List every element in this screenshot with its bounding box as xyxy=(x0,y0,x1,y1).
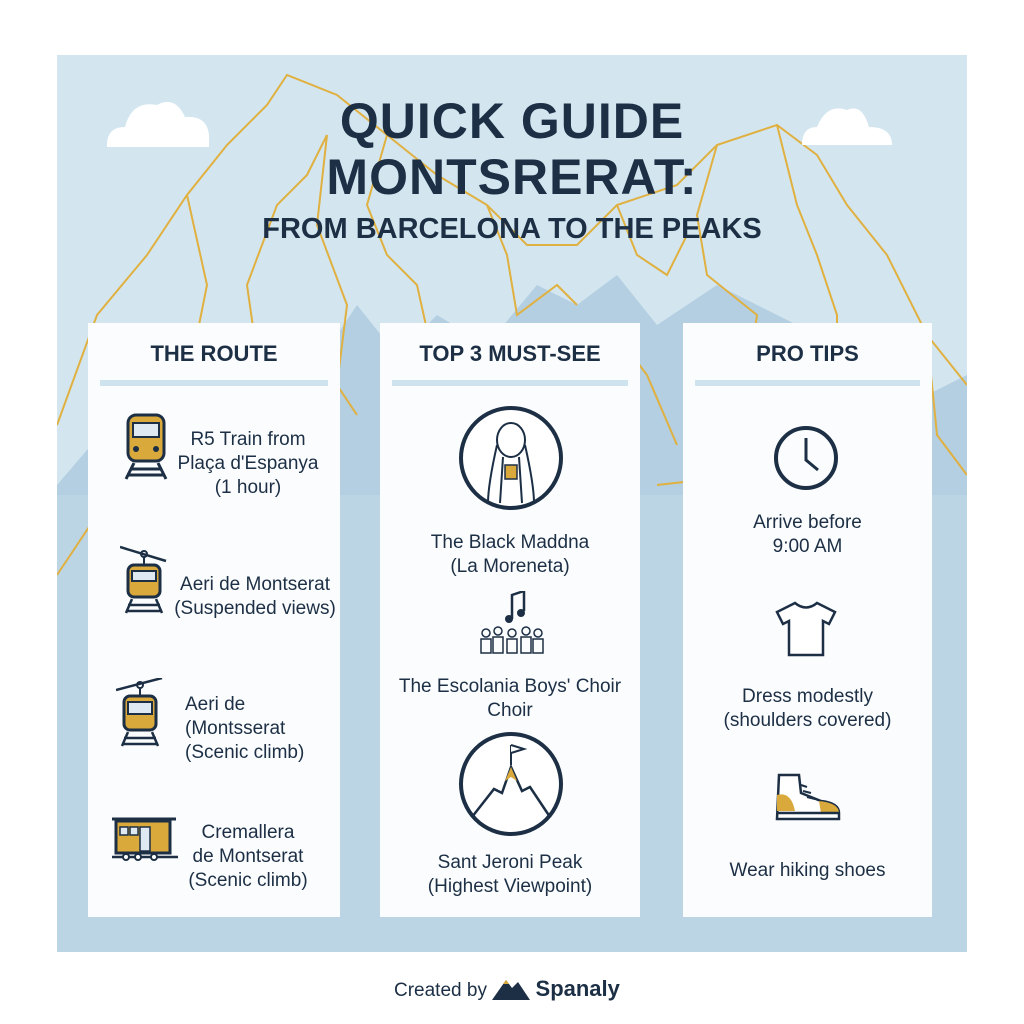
title xyxy=(326,93,698,205)
text: peak: (Highest Viewpoint) xyxy=(428,876,592,897)
text: aeri 2 xyxy=(185,694,304,763)
text: aeri 2: (Scenic climb) xyxy=(185,742,304,763)
panel: pro tips xyxy=(683,323,932,917)
text: cremallera: Cremallera xyxy=(202,822,294,843)
icon: peak xyxy=(459,732,563,836)
text: choir: The Escolania Boys' Choir xyxy=(399,676,621,697)
icon: rack railway xyxy=(112,818,178,861)
icon: logo xyxy=(492,980,530,1000)
panel: the route: THE ROUTE xyxy=(150,341,278,366)
text: arrive xyxy=(753,512,862,557)
title: MONTSRERAT: xyxy=(326,149,698,205)
text: R5 train: R5 Train from xyxy=(190,429,306,450)
panel: the route xyxy=(88,323,340,917)
text: cremallera: de Montserat xyxy=(193,846,303,867)
icon: clock xyxy=(774,426,838,490)
icon: t-shirt xyxy=(775,602,837,656)
text: aeri 1: Aeri de Montserat xyxy=(180,574,330,595)
panel: pro tips: PRO TIPS xyxy=(756,341,859,366)
panel: top 3 must-see xyxy=(380,323,640,917)
subtitle: FROM BARCELONA TO THE PEAKS xyxy=(262,213,762,245)
text: choir xyxy=(399,676,621,721)
text: arrive: 9:00 AM xyxy=(773,536,842,557)
text: aeri 1 xyxy=(174,574,336,619)
text: R5 train xyxy=(178,429,318,498)
panel: top 3 must-see: TOP 3 MUST-SEE xyxy=(419,341,601,366)
text: aeri 2: (Montsserat xyxy=(185,718,285,739)
icon: black madonna xyxy=(459,406,563,510)
text: dress: (shoulders covered) xyxy=(724,710,891,731)
icon: cable car 2 xyxy=(116,678,162,746)
text: choir: Choir xyxy=(487,700,533,721)
text: madonna: (La Moreneta) xyxy=(450,556,570,577)
text: shoes: Wear hiking shoes xyxy=(730,860,885,881)
text: cremallera xyxy=(188,822,308,891)
text: cremallera: (Scenic climb) xyxy=(188,870,308,891)
text: madonna: The Black Maddna xyxy=(431,532,589,553)
text: R5 train: (1 hour) xyxy=(215,477,281,498)
text: peak xyxy=(428,852,592,897)
icon: cable car 1 xyxy=(120,546,166,614)
icon: train xyxy=(124,414,168,480)
background panel xyxy=(57,55,967,952)
text: aeri 2: Aeri de xyxy=(185,694,245,715)
text: madonna xyxy=(431,532,590,577)
clouds xyxy=(107,102,892,147)
icon: choir xyxy=(480,591,544,654)
text: dress xyxy=(724,686,891,731)
text: dress: Dress modestly xyxy=(742,686,873,707)
text: peak: Sant Jeroni Peak xyxy=(438,852,582,873)
text: arrive: Arrive before xyxy=(753,512,862,533)
title: QUICK GUIDE xyxy=(340,93,684,149)
text: aeri 1: (Suspended views) xyxy=(174,598,336,619)
text: R5 train: Plaça d'Espanya xyxy=(178,453,318,474)
footer credit: Created by Spanaly xyxy=(394,976,620,1001)
icon: hiking boot xyxy=(776,774,840,820)
